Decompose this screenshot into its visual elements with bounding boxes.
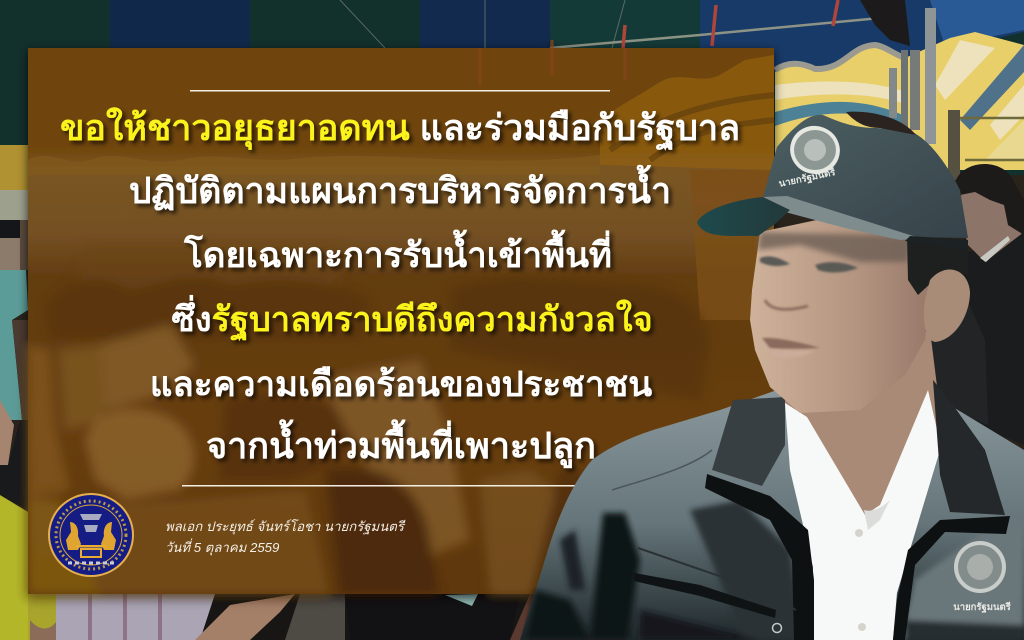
jacket bbox=[520, 380, 1024, 640]
line 2: ปฏิบัติตามแผนการบริหารจัดการน้ำ bbox=[129, 164, 671, 211]
tent seen through the panel bbox=[28, 40, 774, 320]
signature name: พลเอก ประยุทธ์ จันทร์โอชา นายกรัฐมนตรี bbox=[165, 519, 406, 535]
shirt buttons bbox=[855, 529, 863, 537]
line 6: จากน้ำท่วมพื้นที่เพาะปลูก bbox=[206, 419, 596, 469]
bottom crowd strip bbox=[28, 594, 548, 640]
chest pocket bbox=[634, 573, 776, 618]
right collar bbox=[933, 380, 1005, 515]
zipper left bbox=[705, 474, 814, 640]
cap band bbox=[760, 196, 920, 240]
left edge people bbox=[0, 145, 28, 190]
jacket shadows bbox=[525, 500, 1024, 640]
jacket emblem bbox=[953, 541, 1012, 613]
face bbox=[750, 215, 930, 413]
zipper right bbox=[893, 516, 1010, 640]
neck bbox=[770, 330, 945, 520]
signature text bbox=[165, 519, 406, 556]
top divider bbox=[190, 90, 610, 92]
cap emblem bbox=[778, 119, 847, 190]
shirt bbox=[785, 390, 941, 640]
line 4: ซึ่งรัฐบาลทราบดีถึงความกังวลใจ bbox=[171, 294, 653, 342]
bottom divider bbox=[182, 485, 576, 486]
line 5: และความเดือดร้อนของประชาชน bbox=[150, 365, 652, 404]
ear bbox=[924, 270, 970, 342]
statement text bbox=[60, 107, 740, 469]
main figure: man in cap and jacket bbox=[520, 112, 1024, 640]
face shadow under cap bbox=[758, 232, 912, 262]
line 3: โดยเฉพาะการรับน้ำเข้าพื้นที่ bbox=[183, 229, 612, 275]
left collar bbox=[712, 397, 785, 486]
eyes and mouth bbox=[760, 256, 858, 358]
crowd seen through the panel bbox=[28, 245, 710, 594]
person behind on the right bbox=[920, 164, 1024, 445]
signature date: วันที่ 5 ตุลาคม 2559 bbox=[165, 538, 280, 556]
icon: government seal bbox=[48, 493, 134, 577]
jacket emblem: นายกรัฐมนตรี bbox=[953, 601, 1012, 613]
hair behind cap bbox=[846, 112, 916, 135]
cap brim bbox=[697, 197, 790, 236]
tent canopy stripes bbox=[775, 8, 1024, 180]
line 1: ขอให้ชาวอยุธยาอดทน และร่วมมือกับรัฐบาล bbox=[60, 107, 740, 151]
panel: translucent brown text panel bbox=[28, 40, 774, 594]
hair bbox=[907, 236, 968, 295]
cap crown bbox=[763, 115, 968, 238]
cap emblem: นายกรัฐมนตรี bbox=[778, 166, 837, 190]
shoulder seam bbox=[612, 450, 712, 490]
